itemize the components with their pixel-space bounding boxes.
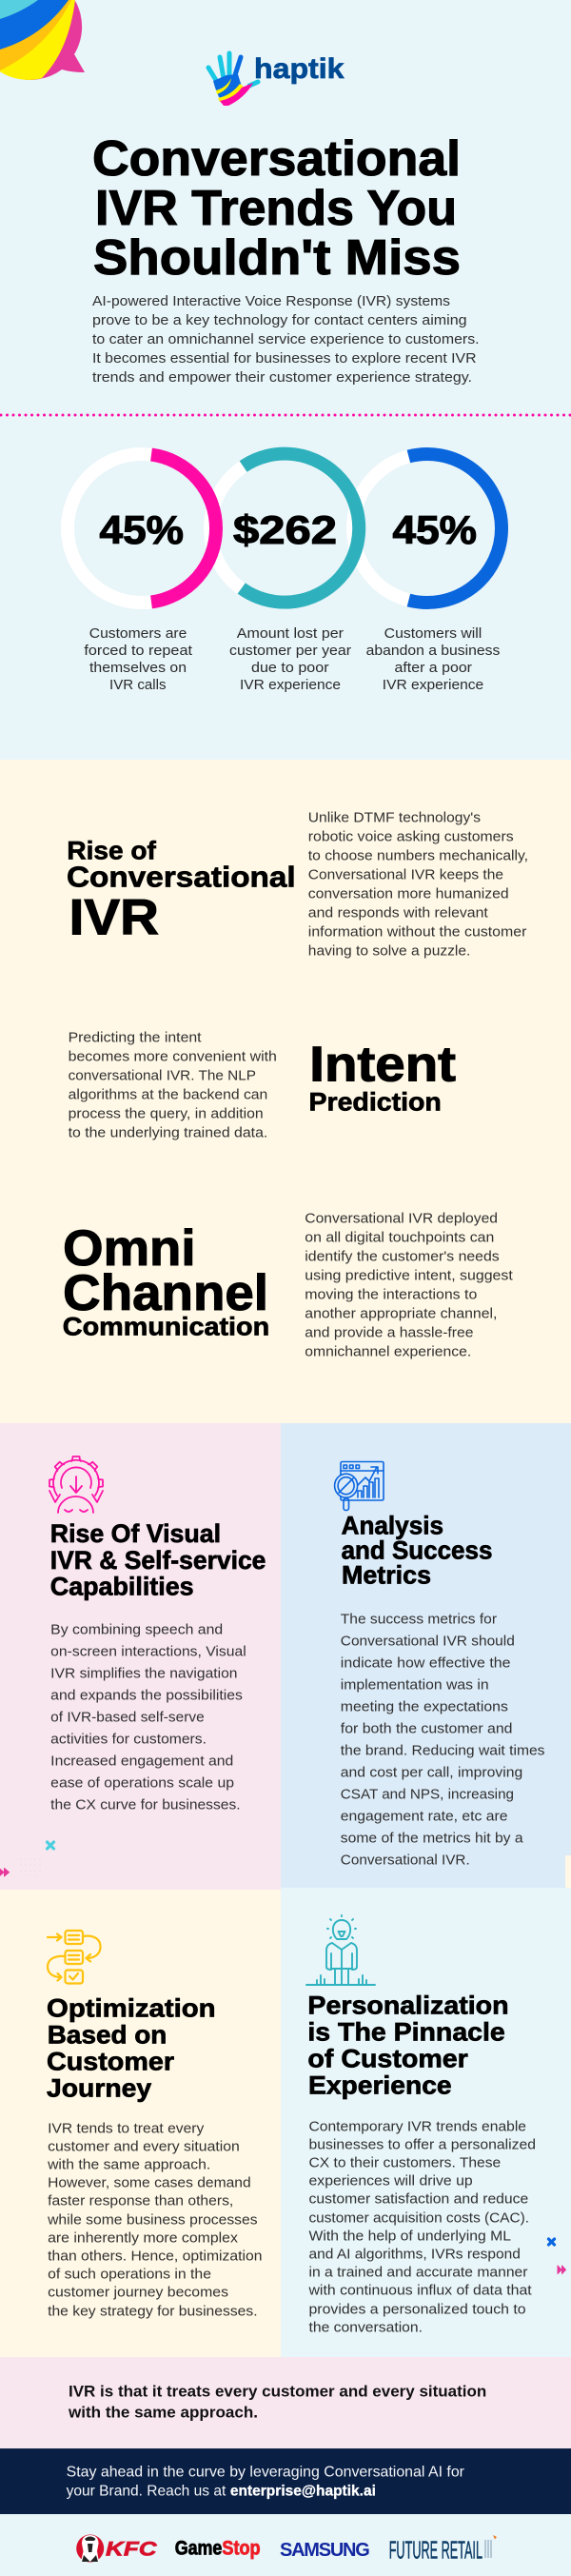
call to action band: your Brand. Reach us at [67, 2483, 226, 2499]
intro text: to cater an omnichannel service experience to customers. [92, 331, 480, 347]
logo wordmark: haptik [254, 53, 345, 85]
body text: moving the interactions to [305, 1286, 477, 1302]
body text: By combining speech and [50, 1622, 223, 1638]
heading: and Success [342, 1536, 492, 1565]
heading: Customer [47, 2047, 175, 2075]
body text: and cost per call, improving [341, 1764, 522, 1780]
body text: of IVR-based self-serve [50, 1710, 205, 1726]
body text: Contemporary IVR trends enable [308, 2118, 526, 2134]
panel: header and stats background [0, 0, 571, 760]
heading: Experience [308, 2071, 452, 2100]
trend: Omni Channel Communication [63, 1210, 514, 1359]
donut: $262 teal [210, 454, 359, 603]
logo: KFC: KFC [106, 2538, 158, 2560]
body text: businesses to offer a personalized [308, 2136, 536, 2152]
body text: Unlike DTMF technology's [308, 809, 481, 825]
heading: IVR [69, 890, 159, 946]
heading [308, 1038, 456, 1117]
panel: Personalization [281, 1888, 571, 2357]
icon: journey flow [48, 1931, 101, 1984]
caption: repeat [84, 626, 192, 693]
heading: Prediction [308, 1088, 442, 1117]
logo: haptik [208, 53, 345, 106]
intro text: trends and empower their customer experience strategy. [92, 369, 472, 386]
body text: with continuous influx of data that [307, 2282, 533, 2298]
callout band: IVR is that it treats every customer and every situation [69, 2384, 486, 2401]
body text: and AI algorithms, IVRs respond [308, 2246, 521, 2262]
caption: repeat: forced to repeat [84, 644, 192, 659]
body text: the brand. Reducing wait times [341, 1742, 544, 1758]
body text: on all digital touchpoints can [305, 1229, 494, 1245]
body text: provides a personalized touch to [308, 2301, 526, 2317]
body text: the CX curve for businesses. [50, 1797, 241, 1813]
body text: Conversational IVR. [341, 1852, 470, 1868]
body text: Conversational IVR should [341, 1633, 515, 1649]
body text: customer journey becomes [48, 2284, 228, 2300]
body text: process the query, in addition [69, 1105, 264, 1121]
stat: 45% second: 45% [392, 507, 477, 552]
body text [50, 1622, 246, 1813]
intro text: It becomes essential for businesses to explore recent IVR [92, 350, 477, 367]
heading: Based on [48, 2020, 167, 2049]
heading: Metrics [342, 1561, 431, 1590]
body text: the key strategy for businesses. [48, 2303, 258, 2319]
body text: ease of operations scale up [50, 1775, 234, 1792]
heading: Journey [47, 2073, 151, 2102]
heading: Channel [63, 1265, 268, 1321]
logo: KFC [76, 2534, 158, 2563]
trend: Rise of Conversational IVR [67, 809, 528, 959]
body text: to the underlying trained data. [69, 1124, 267, 1140]
body text: Conversational IVR keeps the [308, 866, 503, 882]
body text [69, 1029, 277, 1140]
donut: 45% blue [353, 454, 502, 603]
body text: Conversational IVR deployed [305, 1210, 498, 1226]
body text: activities for customers. [50, 1732, 207, 1748]
body text [308, 809, 528, 959]
body text: IVR simplifies the navigation [50, 1666, 237, 1682]
caption: amount lost [229, 626, 351, 693]
caption: abandon: Customers will [384, 626, 482, 642]
call to action band: enterprise@haptik.ai [230, 2483, 376, 2499]
body text: and provide a hassle-free [305, 1324, 474, 1340]
body text: CSAT and NPS, increasing [341, 1786, 514, 1802]
caption: abandon: after a poor [394, 661, 472, 676]
body text [307, 2118, 536, 2335]
trend: Intent Prediction [69, 1029, 456, 1140]
body text: IVR tends to treat every [48, 2120, 205, 2136]
heading: Analysis [342, 1512, 443, 1540]
caption: abandon: abandon a business [366, 644, 500, 659]
caption: amount lost: Amount lost per [237, 626, 344, 642]
body text: conversational IVR. The NLP [69, 1067, 256, 1083]
logo: Future Retail [389, 2535, 497, 2564]
title: Shouldn't Miss [93, 229, 461, 285]
heading: Capabilities [50, 1573, 194, 1601]
body text [305, 1210, 514, 1359]
callout band: with the same approach. [68, 2405, 258, 2422]
body text: and expands the possibilities [50, 1688, 243, 1704]
caption: repeat: themselves on [89, 661, 187, 676]
caption: repeat: Customers are [89, 626, 187, 642]
body text: on-screen interactions, Visual [50, 1644, 246, 1660]
body text: experiences will drive up [308, 2172, 473, 2189]
body text: omnichannel experience. [305, 1343, 471, 1359]
heading: of Customer [307, 2045, 468, 2073]
icon: person with lightbulb head [306, 1915, 375, 1985]
body text: having to solve a puzzle. [308, 942, 470, 959]
body text: With the help of underlying ML [308, 2228, 511, 2244]
caption: amount lost: customer per year [229, 644, 351, 659]
body text: customer and every situation [48, 2138, 240, 2154]
body text: using predictive intent, suggest [305, 1267, 514, 1283]
body text: customer satisfaction and reduce [308, 2190, 528, 2207]
heading: IVR & Self-service [50, 1546, 266, 1575]
title: Conversational [92, 130, 461, 186]
heading: Communication [63, 1313, 269, 1341]
body text: conversation more humanized [308, 885, 509, 902]
logo: SAMSUNG: SAMSUNG [280, 2540, 370, 2561]
panel: trends background [0, 760, 571, 1423]
heading [342, 1512, 492, 1590]
intro text [92, 293, 480, 386]
logo: GameStop [175, 2537, 261, 2559]
icon: gear with head [49, 1456, 103, 1513]
call to action band: Stay ahead in the curve by leveraging Conversational AI for [67, 2464, 465, 2480]
body text [47, 2120, 263, 2319]
heading [307, 1991, 509, 2100]
panel: Rise Of Visual IVR [0, 1423, 281, 1890]
logo: GameStop: Game [175, 2537, 222, 2559]
icon: speech bubble [0, 0, 85, 80]
caption: amount lost: IVR experience [240, 678, 341, 693]
heading [47, 1993, 216, 2102]
body text: faster response than others, [48, 2192, 233, 2209]
body text: However, some cases demand [48, 2174, 251, 2190]
heading [50, 1519, 266, 1601]
caption: amount lost: due to poor [251, 661, 329, 676]
heading: Conversational [67, 860, 296, 893]
title [92, 130, 461, 285]
body text: to choose numbers mechanically, [308, 847, 528, 863]
body text: Increased engagement and [50, 1754, 233, 1770]
heading: Rise Of Visual [50, 1519, 221, 1548]
caption: abandon [366, 626, 500, 693]
body text: meeting the expectations [341, 1698, 508, 1714]
icon: hand [208, 53, 258, 106]
body text: indicate how effective the [341, 1655, 510, 1671]
body text: customer acquisition costs (CAC). [308, 2209, 529, 2226]
logos strip [0, 2514, 571, 2576]
body text: and responds with relevant [308, 904, 489, 921]
body text: implementation was in [341, 1676, 489, 1693]
decoration: cross and chevrons [548, 2239, 565, 2273]
caption: abandon: IVR experience [383, 678, 483, 693]
body text: identify the customer's needs [305, 1248, 500, 1264]
heading: Personalization [307, 1991, 509, 2020]
body text: CX to their customers. These [308, 2154, 501, 2170]
body text: information without the customer [308, 923, 526, 940]
title: IVR Trends You [95, 180, 457, 235]
body text [341, 1611, 544, 1868]
body text: are inherently more complex [48, 2229, 238, 2246]
body text: another appropriate channel, [305, 1305, 497, 1321]
icon: analytics dashboard [335, 1462, 384, 1510]
body text: The success metrics for [341, 1611, 497, 1627]
decoration: cross, dots, chevrons [0, 1842, 53, 1876]
body text: algorithms at the backend can [69, 1086, 267, 1102]
intro text: AI-powered Interactive Voice Response (IVR) systems [92, 293, 450, 309]
body text: the conversation. [308, 2319, 423, 2335]
callout band [0, 2357, 571, 2448]
body text: for both the customer and [341, 1720, 512, 1736]
heading [63, 1220, 269, 1341]
panel: Optimization Based on Customer Journey [0, 1890, 281, 2357]
heading: is The Pinnacle [307, 2018, 505, 2047]
body text: with the same approach. [47, 2156, 210, 2172]
stat: 45%: 45% [99, 507, 184, 552]
body text: becomes more convenient with [69, 1048, 277, 1064]
body text: some of the metrics hit by a [341, 1830, 523, 1846]
body text: engagement rate, etc are [341, 1808, 508, 1824]
body text: while some business processes [47, 2211, 258, 2228]
call to action band [0, 2448, 571, 2514]
heading: Optimization [47, 1993, 216, 2022]
heading: Omni [63, 1220, 196, 1277]
body text: of such operations in the [48, 2266, 211, 2282]
stat: $262: $262 [233, 507, 337, 552]
heading: Intent [309, 1038, 456, 1093]
body text: robotic voice asking customers [308, 828, 514, 844]
intro text: prove to be a key technology for contact centers aiming [92, 312, 467, 328]
panel: Analysis and Success Metrics [281, 1423, 571, 1888]
logo: GameStop: Stop [222, 2537, 261, 2559]
caption: repeat: IVR calls [109, 678, 166, 693]
heading: Rise of [67, 837, 157, 865]
body text: in a trained and accurate manner [308, 2264, 528, 2280]
stats: donut charts [68, 454, 502, 603]
body text: Predicting the intent [69, 1029, 202, 1045]
heading [67, 837, 296, 946]
body text: than others. Hence, optimization [48, 2248, 262, 2264]
donut: 45% pink [68, 454, 216, 603]
